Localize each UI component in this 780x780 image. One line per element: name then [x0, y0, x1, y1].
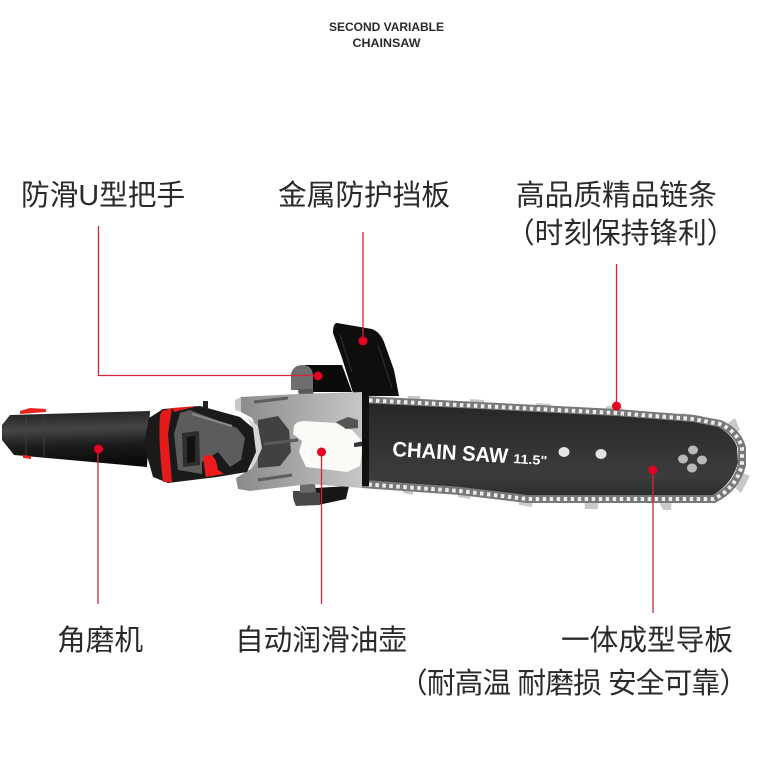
angle grinder body [2, 408, 150, 467]
bar size label: 11.5" [513, 451, 548, 468]
callout: angle grinder: 角磨机 [57, 625, 143, 657]
chain cutters [402, 396, 750, 510]
grinder gear housing [247, 416, 298, 470]
title [329, 22, 444, 50]
callout: high quality chain [506, 180, 736, 410]
callout: metal guard [278, 180, 450, 346]
grinder head [144, 401, 256, 483]
callout: automatic oil bottle [235, 448, 407, 657]
metal guard plate [333, 323, 399, 396]
U handle [291, 365, 352, 405]
callout: automatic oil bottle: 自动润滑油壶 [235, 625, 407, 657]
callout: high quality chain: 高品质精品链条 [516, 180, 717, 212]
oil bottle [293, 417, 364, 472]
callout: one-piece guide bar [399, 466, 748, 700]
title: CHAINSAW [352, 38, 421, 50]
callout: one-piece guide bar: 一体成型导板 [561, 625, 733, 657]
chainsaw product illustration [2, 323, 750, 510]
title: SECOND VARIABLE [329, 22, 444, 34]
guide bar [362, 403, 738, 495]
bar holes [558, 446, 707, 472]
callout: one-piece guide bar: （耐高温 耐磨损 安全可靠） [399, 668, 748, 700]
chain [362, 396, 750, 510]
metal bracket [235, 392, 362, 491]
callout: anti-slip U handle: 防滑U型把手 [21, 180, 185, 212]
callout: angle grinder [57, 444, 143, 657]
bar label: CHAIN SAW [392, 438, 509, 468]
lower handle [293, 475, 349, 506]
callout: metal guard: 金属防护挡板 [278, 180, 450, 212]
callout: high quality chain: （时刻保持锋利） [506, 218, 736, 250]
callout: anti-slip U handle [21, 180, 322, 380]
